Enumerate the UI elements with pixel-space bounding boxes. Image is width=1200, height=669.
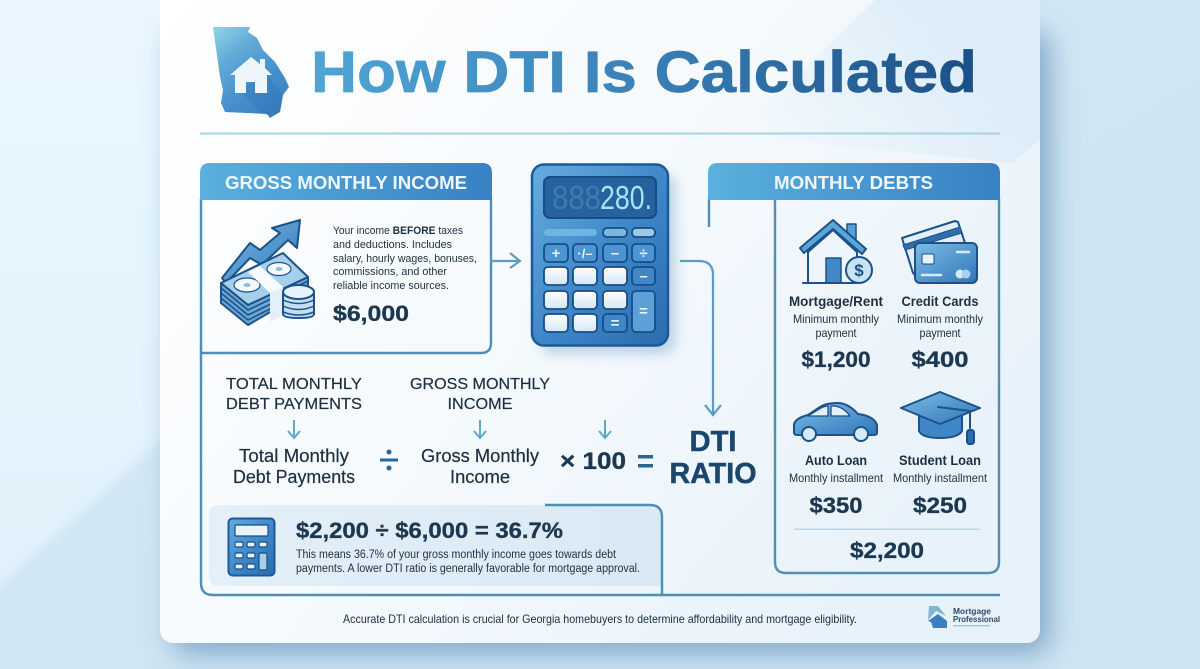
white card xyxy=(160,0,1050,654)
heading: monthly debts xyxy=(708,163,1000,200)
header divider xyxy=(200,132,1000,134)
formula xyxy=(226,376,756,490)
footer note: Accurate DTI calculation is crucial for Georgia homebuyers to determine affordability and mortgage eligibility. xyxy=(343,612,857,626)
division sign xyxy=(380,450,398,470)
income description: salary, hourly wages, bonuses, xyxy=(333,253,477,265)
icon: calculator: = xyxy=(639,303,648,320)
total debts: $2,200 xyxy=(850,538,924,563)
formula term: income: Gross Monthly xyxy=(421,446,539,466)
icon: Georgia map with house xyxy=(213,27,289,118)
income description: Your income BEFORE taxes xyxy=(333,225,463,237)
formula term: income: Income xyxy=(450,467,510,487)
calculation result: $2,200 ÷ $6,000 = 36.7% xyxy=(296,518,563,543)
DTI ratio: RATIO xyxy=(670,458,756,490)
explanation text xyxy=(296,549,640,575)
icon: calculator: – xyxy=(639,268,648,285)
equals sign xyxy=(638,455,653,468)
icon: calculator xyxy=(532,164,676,354)
icon: credit cards xyxy=(902,221,977,283)
item: mortgage/rent: Minimum monthly xyxy=(793,312,879,326)
times 100: × 100 xyxy=(560,448,626,475)
arrow: calculator to DTI ratio xyxy=(680,261,721,415)
item: auto loan: $350 xyxy=(810,493,862,518)
icon: house with dollar coin: $ xyxy=(854,261,864,280)
income description: commissions, and other xyxy=(333,266,447,278)
income amount: $6,000 xyxy=(333,301,409,326)
title: How DTI Is Calculated xyxy=(311,40,977,105)
icon: calculator: = xyxy=(611,315,620,332)
formula label: debt: TOTAL MONTHLY xyxy=(226,376,362,393)
logo: Professional xyxy=(953,615,1000,624)
income description xyxy=(333,225,477,292)
formula label: income: INCOME xyxy=(448,396,512,413)
callout: worked example xyxy=(209,505,662,594)
item: student loan: Monthly installment xyxy=(893,471,988,485)
item: mortgage/rent: Mortgage/Rent xyxy=(789,293,883,309)
panel: gross monthly income xyxy=(200,163,492,353)
item: student loan xyxy=(893,452,988,518)
explanation text: This means 36.7% of your gross monthly income goes towards debt xyxy=(296,549,617,561)
formula term: debt xyxy=(233,446,355,487)
item: mortgage/rent xyxy=(789,293,883,372)
formula term: debt: Total Monthly xyxy=(239,446,349,466)
arrow: income to calculator xyxy=(491,253,520,268)
icon: small calculator xyxy=(228,518,274,576)
icon: car xyxy=(794,403,877,441)
formula section frame xyxy=(201,350,1000,595)
heading: monthly debts: MONTHLY DEBTS xyxy=(774,173,933,193)
item: mortgage/rent: payment xyxy=(816,326,857,340)
logo: Mortgage xyxy=(953,607,992,616)
formula label: income: GROSS MONTHLY xyxy=(410,376,550,393)
icon: graduation cap xyxy=(901,392,980,444)
item: student loan: Student Loan xyxy=(899,452,981,468)
formula label: debt: DEBT PAYMENTS xyxy=(226,396,362,413)
icon: calculator: – xyxy=(611,245,619,262)
heading: gross monthly income xyxy=(200,163,492,200)
panel: monthly debts xyxy=(708,163,1000,573)
formula term: debt: Debt Payments xyxy=(233,467,355,487)
formula label: debt xyxy=(226,376,362,413)
icon: house with dollar coin xyxy=(800,220,872,283)
explanation text: payments. A lower DTI ratio is generally favorable for mortgage approval. xyxy=(296,563,640,575)
icon: calculator: 280. xyxy=(600,179,652,216)
item: credit cards: Minimum monthly xyxy=(897,312,983,326)
DTI ratio: DTI xyxy=(690,426,736,458)
item: student loan: $250 xyxy=(913,493,967,518)
income description: reliable income sources. xyxy=(333,280,449,292)
arrows: formula xyxy=(288,420,611,438)
item: credit cards: Credit Cards xyxy=(902,293,979,309)
heading: gross monthly income: GROSS MONTHLY INCOME xyxy=(225,173,467,193)
item: auto loan: Monthly installment xyxy=(789,471,884,485)
item: credit cards: payment xyxy=(920,326,961,340)
icon: calculator: + xyxy=(552,245,561,262)
icon: calculator: ÷ xyxy=(639,245,648,262)
DTI ratio xyxy=(670,426,756,490)
formula term: income xyxy=(421,446,539,487)
item: credit cards xyxy=(897,293,983,372)
income description: and deductions. Includes xyxy=(333,239,452,251)
icon: calculator: ·/– xyxy=(577,246,593,261)
icon: money stack with rising arrow xyxy=(221,220,314,325)
formula label: income xyxy=(410,376,550,413)
icon: calculator: 888 xyxy=(552,179,601,216)
item: auto loan xyxy=(789,452,884,518)
logo xyxy=(928,606,1000,628)
item: credit cards: $400 xyxy=(912,347,968,372)
item: auto loan: Auto Loan xyxy=(805,452,867,468)
item: mortgage/rent: $1,200 xyxy=(802,347,870,372)
